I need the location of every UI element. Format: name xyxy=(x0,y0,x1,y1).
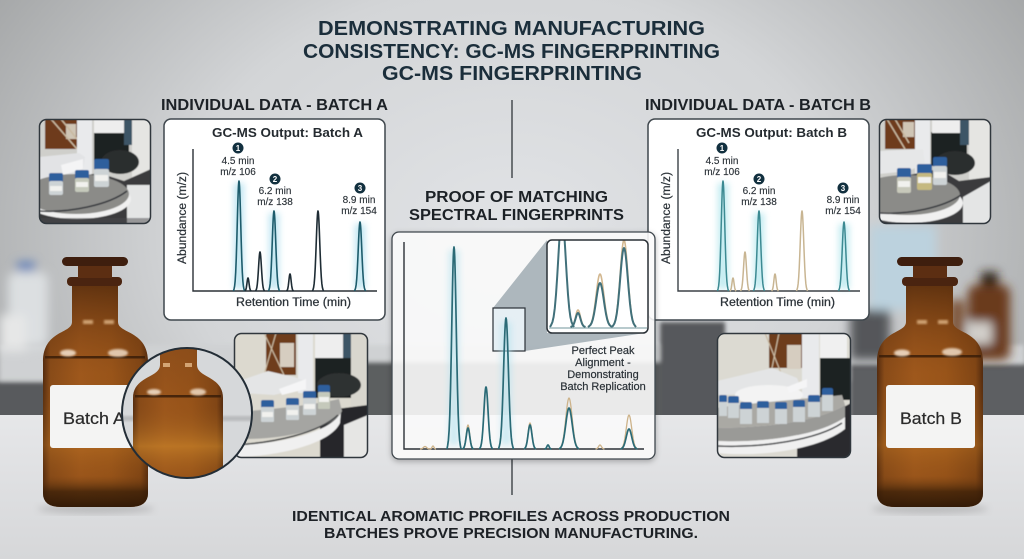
panel: overlaid chromatogram xyxy=(392,217,655,459)
panel: GC-MS output batch A xyxy=(164,119,385,320)
magnifier circle xyxy=(120,345,260,480)
peak label 3 xyxy=(825,182,861,217)
chart: batch A chromatogram xyxy=(193,149,377,291)
conclusion text: BATCHES PROVE PRECISION MANUFACTURING. xyxy=(324,525,698,542)
peak label 1: 4.5 min xyxy=(222,156,254,167)
x axis label: Retention Time (min) xyxy=(720,297,835,309)
callout: perfect peak alignment xyxy=(560,345,646,393)
peak label 2: m/z 138 xyxy=(257,197,293,208)
peak label 2: 6.2 min xyxy=(743,186,775,197)
heading: proof of matching: PROOF OF MATCHING xyxy=(425,189,608,206)
label xyxy=(50,385,138,448)
chart: batch B chromatogram xyxy=(678,149,860,291)
peak label 1 xyxy=(704,142,740,178)
peak label 2: 2 xyxy=(273,175,278,184)
peak label 3: 3 xyxy=(841,184,846,193)
peak label 1: m/z 106 xyxy=(220,167,256,178)
photo: autosampler top left xyxy=(38,118,152,224)
peak label 1 xyxy=(220,142,256,178)
inset: magnified peaks xyxy=(546,239,649,334)
peak label 2 xyxy=(741,174,777,208)
title: GC-MS FINGERPRINTING xyxy=(382,63,642,85)
title: CONSISTENCY: GC-MS FINGERPRINTING xyxy=(303,41,720,63)
conclusion text: IDENTICAL AROMATIC PROFILES ACROSS PRODUCTION xyxy=(292,508,730,525)
y axis label: Abundance (m/z) xyxy=(661,172,673,264)
x axis label: Retention Time (min) xyxy=(236,297,351,309)
peak label 3: 8.9 min xyxy=(343,195,375,206)
peak label 3: 3 xyxy=(358,184,363,193)
callout: perfect peak alignment: Batch Replication xyxy=(560,381,646,393)
title: DEMONSTRATING MANUFACTURING xyxy=(318,18,705,40)
peak label 3 xyxy=(341,182,377,217)
conclusion text xyxy=(292,508,730,542)
peak label 2: 2 xyxy=(757,175,762,184)
peak label 1: m/z 106 xyxy=(704,167,740,178)
title xyxy=(303,18,720,85)
chart: overlaid spectra xyxy=(404,242,644,449)
callout: perfect peak alignment: Alignment - xyxy=(575,357,631,369)
peak label 1: 1 xyxy=(236,144,241,153)
heading: individual data batch B: INDIVIDUAL DATA - BATCH B xyxy=(645,97,871,114)
panel title: GC-MS Output: Batch A xyxy=(212,125,364,140)
label xyxy=(886,385,975,448)
panel: GC-MS output batch B xyxy=(648,119,869,320)
bottle text: Batch A xyxy=(63,410,125,428)
y axis label: Abundance (m/z) xyxy=(177,172,189,264)
bottle: Batch B xyxy=(872,257,988,514)
heading: individual data batch A: INDIVIDUAL DATA - BATCH A xyxy=(161,97,388,114)
peak label 2: m/z 138 xyxy=(741,197,777,208)
callout: perfect peak alignment: Perfect Peak xyxy=(572,345,635,357)
peak label 2: 6.2 min xyxy=(259,186,291,197)
bottle text: Batch B xyxy=(900,410,962,428)
panel title: GC-MS Output: Batch B xyxy=(696,125,847,140)
photo: autosampler lower left xyxy=(234,333,368,458)
heading: proof of matching: SPECTRAL FINGERPRINTS xyxy=(409,207,624,224)
peak label 1: 1 xyxy=(720,144,725,153)
peak label 1: 4.5 min xyxy=(706,156,738,167)
peak label 3: m/z 154 xyxy=(825,206,861,217)
callout: perfect peak alignment: Demonstrating xyxy=(567,369,639,381)
zoom wedge xyxy=(493,240,645,351)
peak label 3: 8.9 min xyxy=(827,195,859,206)
photo: autosampler lower right xyxy=(717,333,851,458)
peak label 3: m/z 154 xyxy=(341,206,377,217)
photo: autosampler top right xyxy=(878,118,992,224)
zoom selection box xyxy=(493,308,525,351)
bottle: Batch A xyxy=(38,257,154,514)
heading: proof of matching xyxy=(409,189,624,224)
peak label 2 xyxy=(257,174,293,208)
